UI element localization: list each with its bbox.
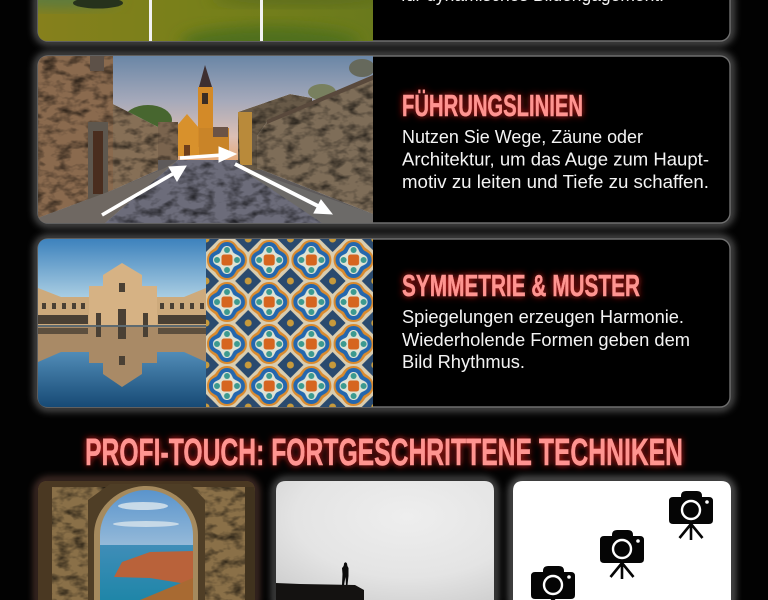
text: Symmetrie description: Spiegelungen erzeugen Harmonie.: [402, 307, 684, 327]
text: Symmetrie description: [402, 307, 690, 372]
text: Führungslinien description: Nutzen Sie Wege, Zäune oder: [402, 127, 643, 147]
photo: village street with leading lines: [38, 56, 375, 224]
road: [105, 160, 322, 223]
icon: camera high: [669, 491, 713, 540]
text: Symmetrie description: Bild Rhythmus.: [402, 352, 525, 372]
card: changing perspective with cameras: [512, 480, 732, 600]
heading: Führungslinien: FÜHRUNGSLINIEN: [402, 88, 583, 123]
palace: [38, 286, 206, 325]
tile pattern: [206, 239, 373, 407]
left building: [38, 56, 113, 218]
right wall: [257, 77, 373, 214]
icon: camera middle: [600, 530, 644, 579]
panel: Symmetrie und Muster: [37, 238, 731, 408]
card: framing through an arch: [37, 480, 256, 600]
text: Führungslinien description: [402, 127, 709, 192]
text: Führungslinien description: Architektur, um das Auge zum Haupt-: [402, 150, 709, 170]
icon: cliff: [276, 583, 364, 600]
panel: rule of thirds: [30, 0, 738, 50]
photo: palace reflection and tiles: [38, 239, 373, 407]
panel: Führungslinien: [37, 55, 731, 224]
arrows: [102, 147, 332, 215]
text: Führungslinien description: motiv zu leiten und Tiefe zu schaffen.: [402, 172, 709, 192]
text: Symmetrie description: Wiederholende Formen geben dem: [402, 330, 690, 350]
photo: green field with grid lines: [38, 0, 373, 41]
heading: Symmetrie und Muster: SYMMETRIE & MUSTER: [402, 268, 640, 303]
card: negative space: [275, 480, 495, 600]
icon: silhouette: [342, 562, 348, 585]
icon: camera low: [531, 566, 575, 600]
right buildings: [238, 94, 312, 170]
reflection: [38, 327, 206, 387]
church: [175, 65, 229, 156]
